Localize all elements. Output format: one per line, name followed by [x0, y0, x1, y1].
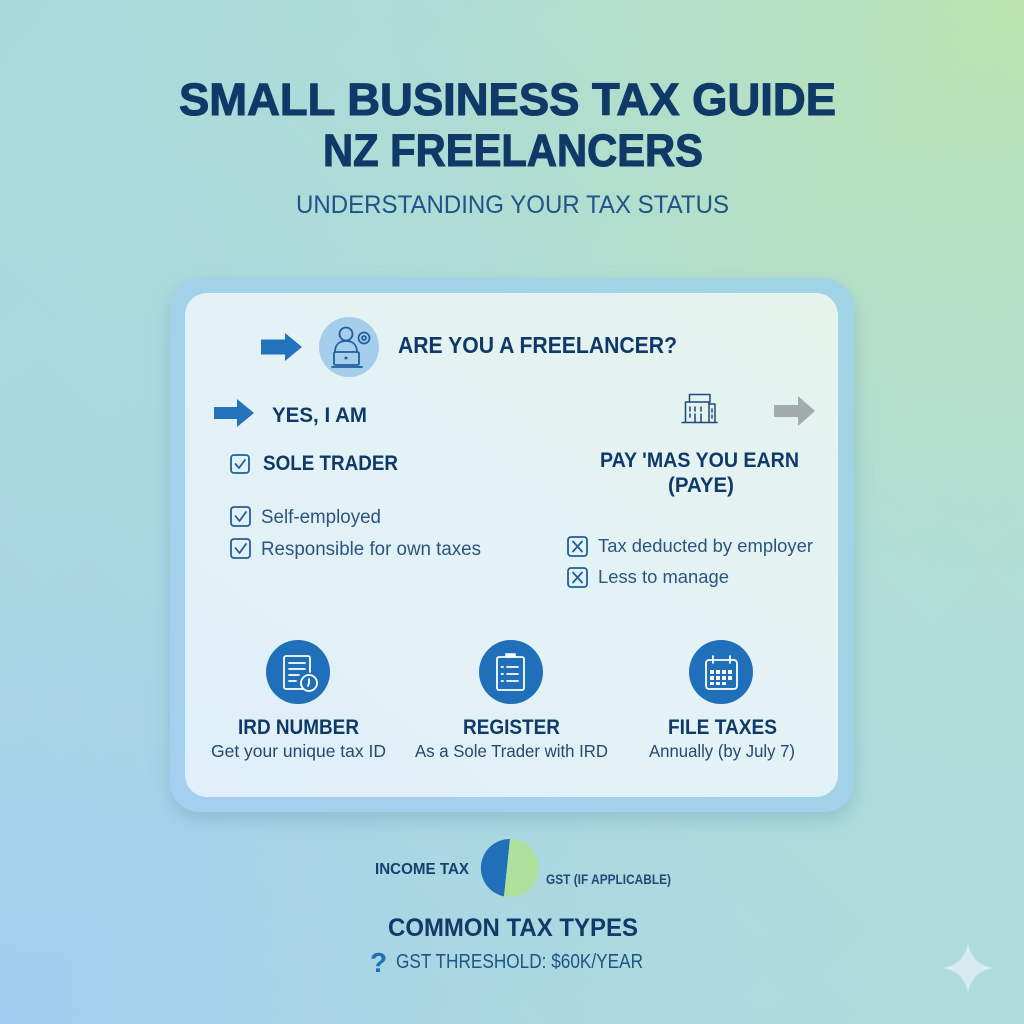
step: IRD number: IRD NUMBER	[238, 716, 359, 739]
sole trader heading: SOLE TRADER	[263, 452, 398, 475]
step: IRD number: Get your unique tax ID	[211, 741, 386, 761]
panel frame	[170, 278, 854, 812]
icon: document with clock	[266, 640, 330, 704]
step: register	[415, 640, 608, 761]
title: SMALL BUSINESS TAX GUIDE	[179, 74, 836, 125]
PAYE heading: (PAYE)	[668, 474, 734, 497]
PAYE item: less to manage: Less to manage	[598, 566, 729, 587]
subtitle: UNDERSTANDING YOUR TAX STATUS	[296, 191, 729, 219]
step: register: REGISTER	[463, 716, 560, 739]
arrow: to question	[261, 333, 302, 361]
sole trader item: self-employed: Self-employed	[261, 507, 381, 528]
arrow: grey	[774, 396, 815, 426]
GST threshold note: GST THRESHOLD: $60K/YEAR	[396, 951, 643, 973]
pie label: GST: GST (IF APPLICABLE)	[546, 871, 671, 887]
title: NZ FREELANCERS	[323, 125, 703, 176]
yes heading: YES, I AM	[272, 404, 367, 427]
icon: sparkle	[943, 943, 993, 993]
GST threshold note: ?	[370, 947, 387, 978]
step: IRD number	[211, 640, 386, 761]
icon: calendar	[689, 640, 753, 704]
PAYE heading	[600, 449, 799, 497]
GST threshold note	[370, 947, 643, 978]
step: file taxes: Annually (by July 7)	[649, 741, 795, 761]
PAYE heading: PAY 'MAS YOU EARN	[600, 449, 799, 472]
question heading: ARE YOU A FREELANCER?	[398, 332, 677, 358]
step: file taxes: FILE TAXES	[668, 716, 777, 739]
step: file taxes	[649, 640, 795, 761]
title	[179, 74, 836, 176]
sole trader item: responsible: Responsible for own taxes	[261, 539, 481, 560]
pie chart: common tax types	[481, 839, 539, 897]
icon: clipboard	[479, 640, 543, 704]
PAYE item: tax deducted: Tax deducted by employer	[598, 535, 813, 556]
arrow: yes	[214, 399, 254, 427]
icon: office building	[682, 394, 717, 422]
panel: freelancer decision card	[170, 278, 854, 812]
pie label: income tax: INCOME TAX	[375, 861, 470, 878]
panel inner surface	[185, 293, 838, 797]
step: register: As a Sole Trader with IRD	[415, 741, 608, 761]
icon: freelancer at laptop	[319, 317, 379, 377]
heading: common tax types: COMMON TAX TYPES	[388, 914, 638, 942]
